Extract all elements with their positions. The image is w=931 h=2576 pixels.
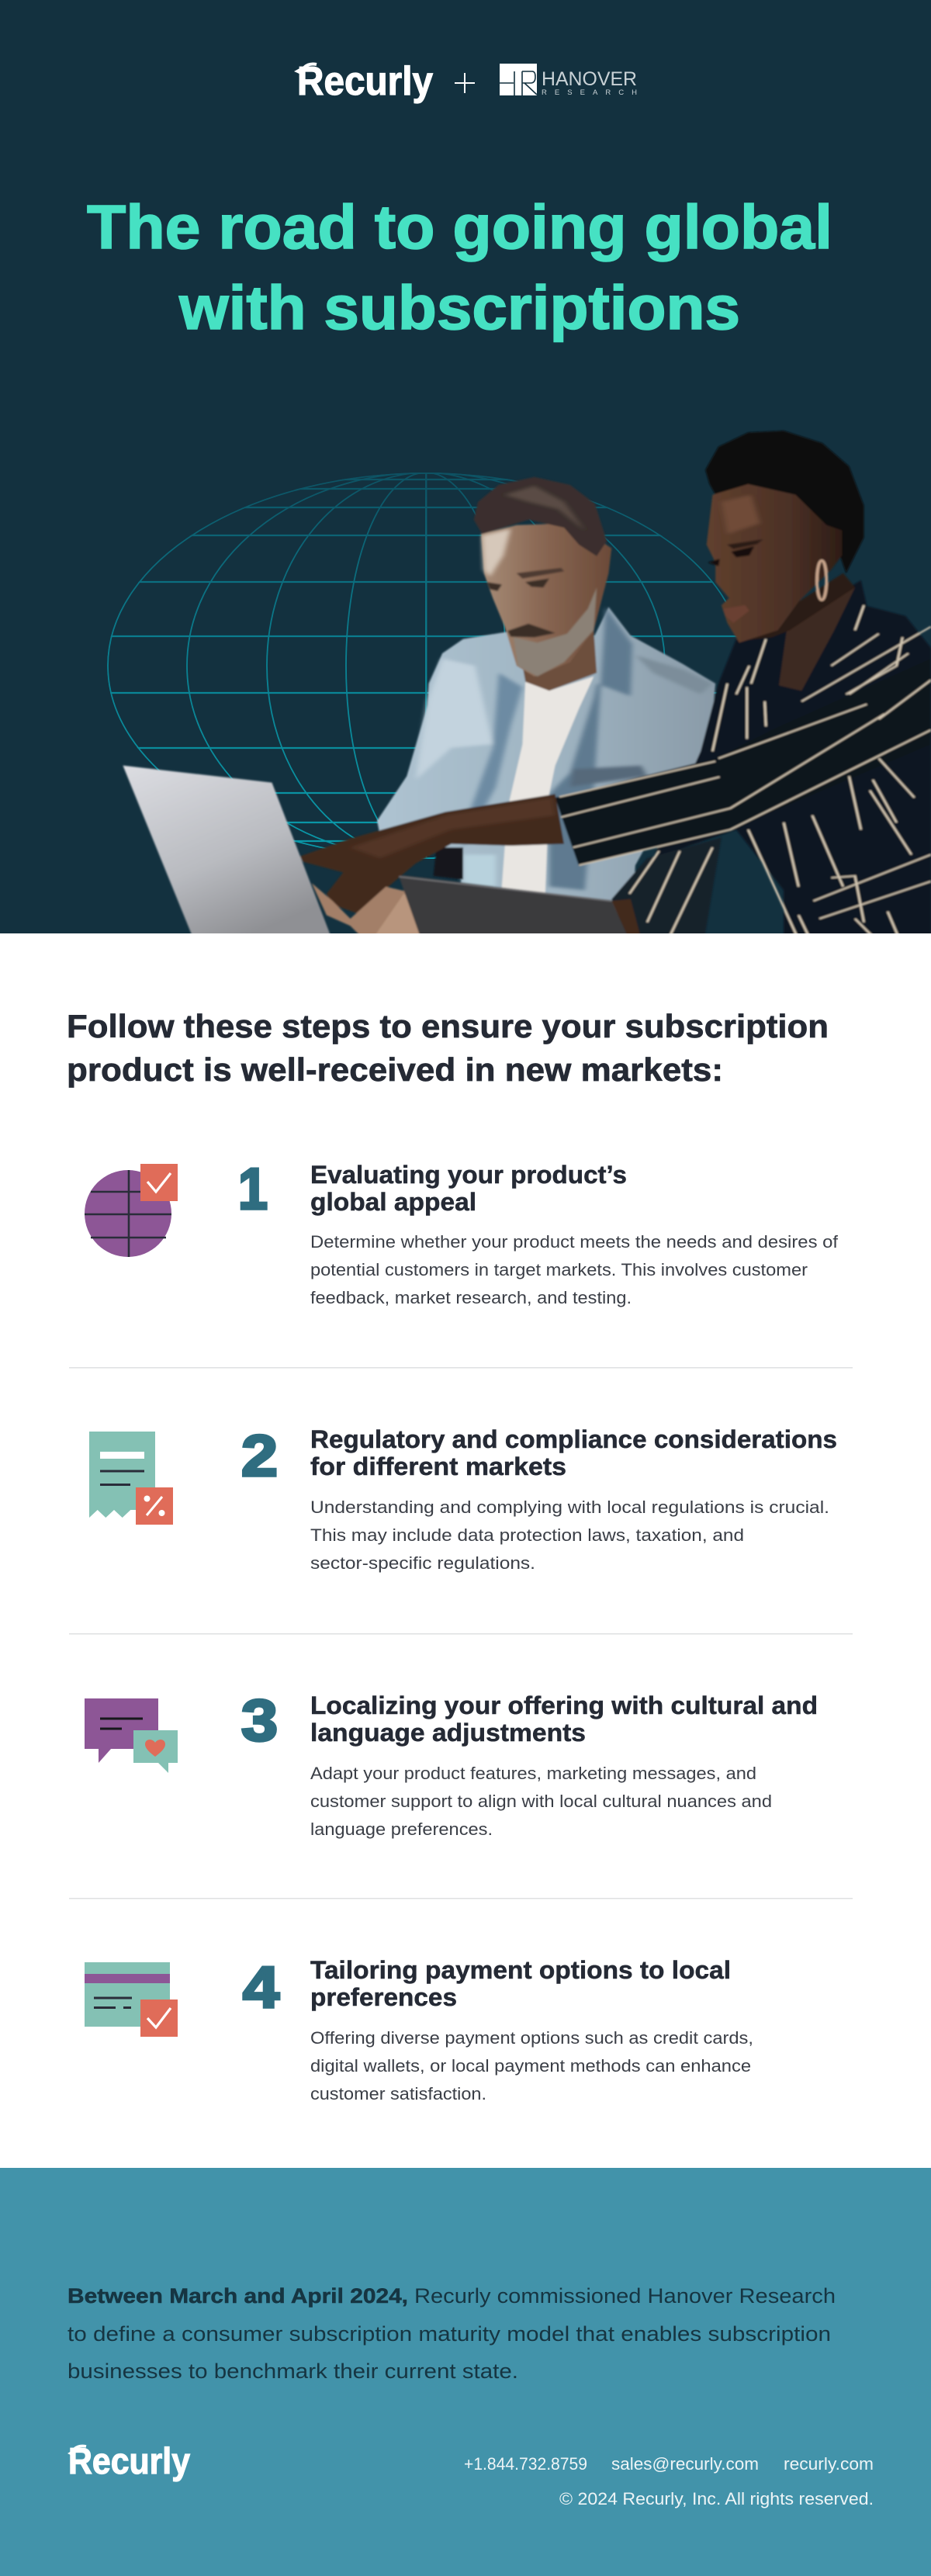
heading: follow these steps (67, 1008, 829, 1088)
number 1: 1 (238, 1156, 268, 1221)
panel: footer (0, 2168, 931, 2576)
man: moustache and eyes (487, 568, 564, 637)
footer contact details (464, 2454, 874, 2474)
step 2 heading: Regulatory and compliance considerations (310, 1425, 837, 1453)
footer statement: Recurly commissioned Hanover Research (414, 2284, 836, 2308)
step 2 text (310, 1497, 829, 1573)
title: The road to going global (87, 192, 832, 261)
laptop (123, 766, 334, 943)
woman: forehead highlight (722, 495, 760, 534)
panel: hero background (0, 0, 931, 933)
icon: globe with check (85, 1164, 178, 1257)
man: hands (311, 883, 407, 933)
woman: lower jacket flap (611, 837, 722, 943)
heading: follow these steps: Follow these steps to ensure your subscription (67, 1008, 829, 1044)
woman: face details (708, 539, 763, 623)
footer statement: businesses to benchmark their current state. (67, 2360, 518, 2383)
logo: Hanover Research (500, 64, 637, 97)
footer contact details: sales@recurly.com (611, 2454, 759, 2474)
footer statement (67, 2284, 836, 2383)
man: neck (522, 630, 597, 691)
man: shirt highlights and collar (416, 607, 712, 890)
man: beard (514, 587, 597, 677)
footer contact details: recurly.com (784, 2454, 874, 2474)
logo: Recurly: Recurly (297, 59, 433, 104)
step 3 (85, 1688, 818, 1839)
woman: stripes (559, 605, 931, 943)
footer contact details: +1.844.732.8759 (464, 2454, 587, 2474)
woman: face (707, 484, 842, 642)
man: t-shirt (501, 676, 594, 894)
step 4 text (310, 2028, 753, 2103)
photo: two people at laptops (123, 431, 931, 943)
man: hair (474, 477, 607, 556)
step 3 heading: language adjustments (310, 1719, 586, 1747)
plus sign (455, 73, 475, 93)
man: shirt (376, 607, 717, 902)
step 4 heading (310, 1956, 731, 2011)
step 3 heading (310, 1691, 818, 1747)
step 1 text: potential customers in target markets. This involves customer (310, 1260, 808, 1279)
footer statement: Between March and April 2024, (67, 2284, 408, 2308)
title: with subscriptions (178, 273, 740, 342)
step 1 heading (310, 1161, 627, 1216)
step 3 text (310, 1764, 772, 1839)
woman: chest skin (779, 587, 855, 691)
step 1 text: Determine whether your product meets the needs and desires of (310, 1232, 839, 1252)
step 3 text: customer support to align with local cultural nuances and (310, 1792, 772, 1811)
step 3 heading: Localizing your offering with cultural and (310, 1691, 818, 1719)
footer statement: to define a consumer subscription maturity model that enables subscription (67, 2322, 831, 2346)
step 2 text: This may include data protection laws, taxation, and (310, 1525, 744, 1545)
step 2 heading (310, 1425, 837, 1480)
step 2 text: Understanding and complying with local regulations is crucial. (310, 1497, 829, 1517)
step 1 text (310, 1232, 839, 1307)
step 4 text: digital wallets, or local payment methods can enhance (310, 2056, 751, 2076)
woman: forearm and hand (299, 794, 564, 915)
tablet (399, 875, 632, 943)
step 1 text: feedback, market research, and testing. (310, 1288, 632, 1307)
icon: receipt with percent (89, 1432, 173, 1525)
number 2: 2 (241, 1423, 278, 1488)
logo: Hanover Research: RESEARCH (542, 88, 637, 97)
woman: jacket (653, 580, 931, 943)
panel: steps background (0, 933, 931, 2168)
step 1 (85, 1156, 839, 1307)
globe grid (101, 473, 753, 860)
title (87, 192, 832, 342)
woman: hair (705, 431, 864, 573)
dark under arm (434, 847, 463, 880)
icon: payment card with check (85, 1962, 178, 2037)
step 2 heading: for different markets (310, 1452, 566, 1480)
man: forehead highlight (482, 528, 510, 576)
woman: earring (817, 560, 826, 601)
woman: left hand behind tablet (611, 898, 641, 933)
woman: neck (739, 573, 855, 641)
hero image (101, 431, 931, 943)
step 1 heading: Evaluating your product’s (310, 1161, 627, 1189)
number 4: 4 (243, 1955, 279, 2020)
icon: speech bubbles (85, 1698, 178, 1773)
logo: Recurly footer: Recurly (68, 2440, 190, 2481)
step 4 heading: Tailoring payment options to local (310, 1956, 731, 1984)
step 2 (89, 1423, 837, 1573)
step 4 text: Offering diverse payment options such as credit cards, (310, 2028, 753, 2048)
logos row (294, 59, 637, 104)
step 3 text: language preferences. (310, 1819, 493, 1839)
man: face (481, 523, 611, 677)
step 3 text: Adapt your product features, marketing messages, and (310, 1764, 756, 1783)
step 4 (85, 1955, 753, 2103)
step 2 text: sector-specific regulations. (310, 1553, 535, 1573)
logo: Hanover Research: HANOVER (542, 68, 637, 90)
step 4 heading: preferences (310, 1983, 457, 2011)
heading: follow these steps: product is well-received in new markets: (67, 1051, 723, 1088)
step 1 heading: global appeal (310, 1188, 476, 1216)
number 3: 3 (241, 1688, 278, 1753)
woman: sleeve (554, 701, 899, 866)
step 4 text: customer satisfaction. (310, 2084, 486, 2103)
copyright: © 2024 Recurly, Inc. All rights reserved. (559, 2489, 874, 2508)
